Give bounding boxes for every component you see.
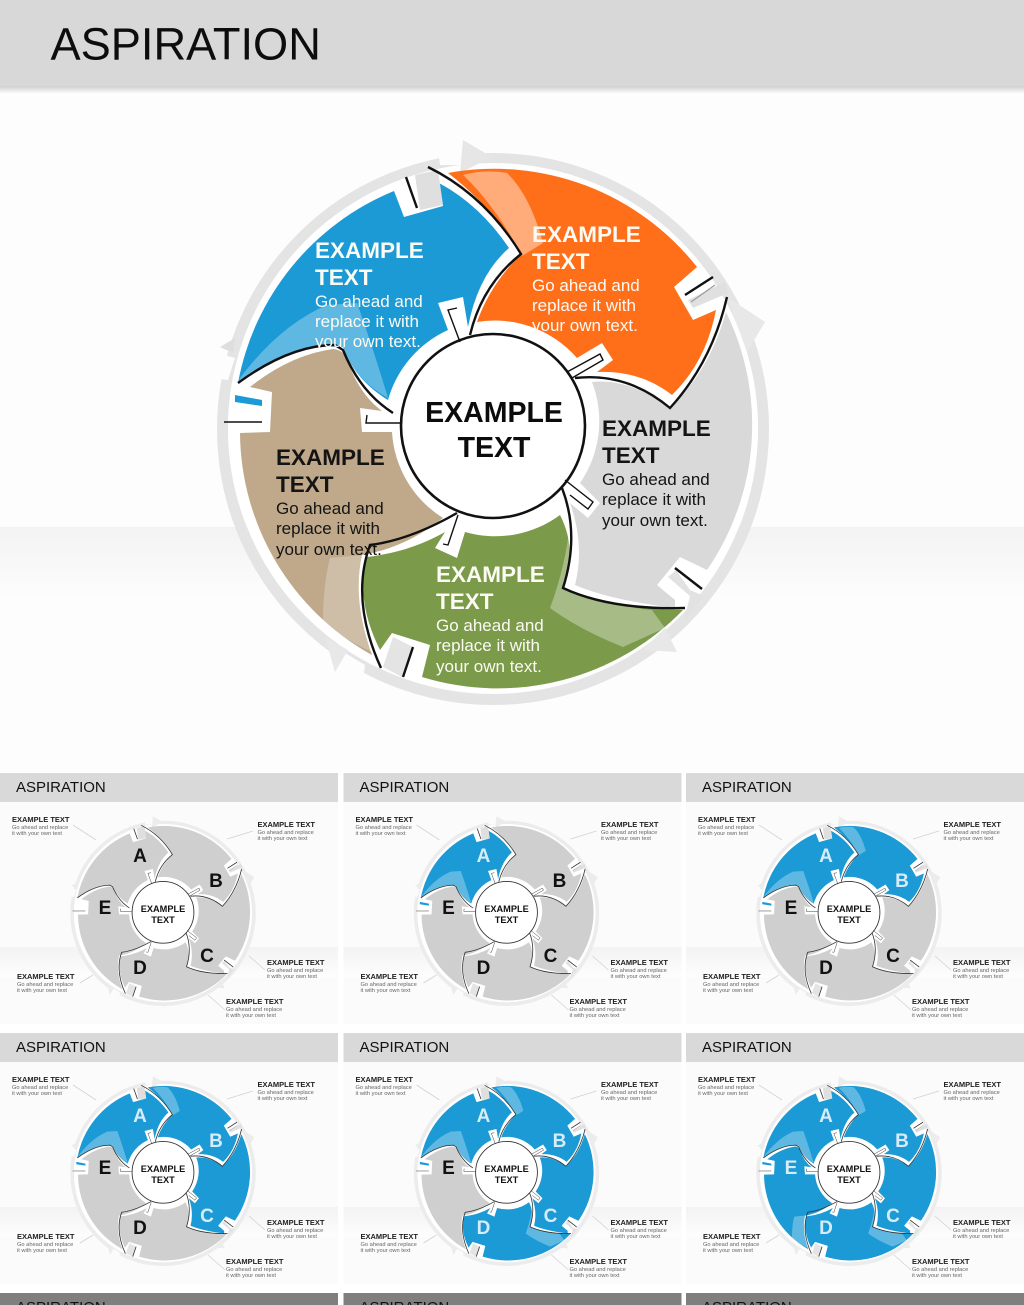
- panel: thumbnail 4, segments A to C highlighted: it with your own text: [226, 1273, 276, 1279]
- panel: thumbnail 6, all segments highlighted: D: [819, 1218, 833, 1239]
- text block: tan segment: replace it with: [276, 519, 380, 538]
- panel: thumbnail 4, segments A to C highlighted: it with your own text: [12, 1091, 62, 1097]
- panel: thumbnail 3, segments A and B highlighted: Go ahead and replace: [698, 825, 754, 831]
- text block: grey segment: Go ahead and: [602, 470, 710, 489]
- panel: thumbnail 1, no segments highlighted: C: [200, 946, 214, 967]
- panel: thumbnail 2, segment A highlighted: A: [477, 846, 491, 867]
- panel: thumbnail 4, segments A to C highlighted: EXAMPLE TEXT: [226, 1257, 284, 1266]
- panel: thumbnail 2, segment A highlighted: it with your own text: [360, 988, 411, 994]
- panel: thumbnail 5, segments A to D highlighted: EXAMPLE TEXT: [360, 1232, 418, 1241]
- segment B: orange arrow: [448, 169, 716, 395]
- text block: tan segment: [276, 445, 385, 559]
- title banner: ASPIRATION: [50, 18, 321, 70]
- panel: thumbnail 5, segments A to D highlighted: Go ahead and replace: [570, 1267, 626, 1273]
- panel: thumbnail 4, segments A to C highlighted: it with your own text: [258, 1096, 308, 1102]
- text block: orange segment: TEXT: [532, 249, 590, 274]
- panel: thumbnail 4, segments A to C highlighted: EXAMPLE TEXT: [258, 1080, 315, 1089]
- panel: thumbnail 4, segments A to C highlighted: ASPIRATION: [16, 1039, 106, 1056]
- panel: thumbnail 5, segments A to D highlighted: B: [553, 1131, 566, 1152]
- centre circle: [401, 334, 585, 518]
- panel: thumbnail 6, all segments highlighted: it with your own text: [698, 1091, 748, 1097]
- panel: thumbnail 3, segments A and B highlighted: C: [886, 946, 900, 967]
- panel: thumbnail 2, segment A highlighted: C: [544, 946, 558, 967]
- panel: thumbnail 3, segments A and B highlighted: it with your own text: [953, 974, 1003, 980]
- panel: thumbnail 1, no segments highlighted: it with your own text: [226, 1013, 276, 1019]
- text block: green segment: [436, 562, 545, 676]
- panel: thumbnail 4, segments A to C highlighted: EXAMPLE TEXT: [17, 1232, 75, 1241]
- panel: thumbnail 1, no segments highlighted: E: [99, 898, 111, 919]
- panel: thumbnail 1, no segments highlighted: A: [133, 846, 147, 867]
- panel: thumbnail 1, no segments highlighted: D: [133, 958, 147, 979]
- panel: thumbnail 2, segment A highlighted: EXAMPLE TEXT: [356, 815, 413, 824]
- panel: thumbnail 3, segments A and B highlighted: EXAMPLE: [827, 904, 871, 914]
- panel: thumbnail 1, no segments highlighted: Go ahead and replace: [17, 982, 73, 988]
- panel: main diagram background: [0, 92, 1024, 772]
- panel: thumbnail 4, segments A to C highlighted: Go ahead and replace: [267, 1228, 323, 1234]
- panel: thumbnail 3, segments A and B highlighted: it with your own text: [944, 836, 994, 842]
- panel: thumbnail 2, segment A highlighted: Go ahead and replace: [360, 982, 417, 988]
- panel: thumbnail 5, segments A to D highlighted: it with your own text: [601, 1096, 651, 1102]
- panel: thumbnail 1, no segments highlighted: it with your own text: [12, 831, 62, 837]
- tab details and grey shafts: [235, 170, 728, 677]
- panel: thumbnail 1, no segments highlighted: EXAMPLE TEXT: [267, 958, 325, 967]
- panel: thumbnail 4, segments A to C highlighted: EXAMPLE: [141, 1164, 185, 1174]
- text block: grey segment: TEXT: [602, 443, 660, 468]
- panel: thumbnail 1, no segments highlighted: it with your own text: [267, 974, 317, 980]
- panel: thumbnail 4, segments A to C highlighted: A: [133, 1106, 147, 1127]
- text block: tan segment: your own text.: [276, 540, 382, 559]
- text block: blue segment: TEXT: [315, 265, 373, 290]
- center label: TEXT: [458, 432, 531, 464]
- panel: thumbnail 2, segment A highlighted: EXAMPLE TEXT: [360, 972, 418, 981]
- panel: thumbnail 3, segments A and B highlighted: EXAMPLE TEXT: [944, 820, 1001, 829]
- panel: thumbnail 3, segments A and B highlighted: EXAMPLE TEXT: [912, 997, 970, 1006]
- black arrow-head outlines: [224, 167, 727, 677]
- panel: thumbnail 6, all segments highlighted: EXAMPLE TEXT: [912, 1257, 970, 1266]
- panel: thumbnail 4, segments A to C highlighted: E: [99, 1158, 111, 1179]
- text block: blue segment: replace it with: [315, 312, 419, 331]
- panel: thumbnail 1, no segments highlighted: EXAMPLE TEXT: [258, 820, 315, 829]
- panel: thumbnail 6, all segments highlighted: Go ahead and replace: [703, 1242, 759, 1248]
- panel: thumbnail 4, segments A to C highlighted: TEXT: [151, 1175, 175, 1185]
- panel: thumbnail 3, segments A and B highlighted: EXAMPLE TEXT: [703, 972, 761, 981]
- panel: thumbnail 6, all segments highlighted: Go ahead and replace: [953, 1228, 1009, 1234]
- panel: thumbnail 6, all segments highlighted: TEXT: [837, 1175, 861, 1185]
- panel: thumbnail 6, all segments highlighted: EXAMPLE TEXT: [953, 1218, 1011, 1227]
- panel: thumbnail 4, segments A to C highlighted: B: [209, 1131, 223, 1152]
- panel: thumbnail 5, segments A to D highlighted: EXAMPLE TEXT: [356, 1075, 413, 1084]
- text block: grey segment: replace it with: [602, 490, 706, 509]
- text block: orange segment: [532, 222, 641, 335]
- panel: thumbnail 3, segments A and B highlighted: [686, 773, 1024, 1024]
- panel: thumbnail 6, all segments highlighted: E: [785, 1158, 797, 1179]
- text block: blue segment: [315, 238, 424, 351]
- panel: thumbnail 2, segment A highlighted: D: [477, 958, 490, 979]
- panel: thumbnail 3, segments A and B highlighted: TEXT: [837, 915, 861, 925]
- panel: thumbnail 6, all segments highlighted: EXAMPLE TEXT: [944, 1080, 1001, 1089]
- panel: thumbnail 3, segments A and B highlighted: it with your own text: [698, 831, 748, 837]
- panel: thumbnail 5, segments A to D highlighted: C: [544, 1206, 558, 1227]
- panel: thumbnail 2, segment A highlighted: EXAMPLE TEXT: [601, 820, 659, 829]
- panel: thumbnail 1, no segments highlighted: TEXT: [151, 915, 175, 925]
- text block: green segment: replace it with: [436, 636, 540, 655]
- segment C: grey arrow: [570, 312, 752, 608]
- panel: thumbnail 2, segment A highlighted: Go ahead and replace: [356, 825, 412, 831]
- text block: orange segment: your own text.: [532, 316, 638, 335]
- panel: thumbnail 1, no segments highlighted: ASPIRATION: [16, 779, 106, 796]
- cropped bottom row headers: [0, 1293, 1024, 1305]
- panel: thumbnail 2, segment A highlighted: [344, 773, 682, 1024]
- title banner: [0, 0, 1024, 94]
- panel: thumbnail 5, segments A to D highlighted: it with your own text: [360, 1248, 411, 1254]
- panel: thumbnail 5, segments A to D highlighted: EXAMPLE TEXT: [601, 1080, 659, 1089]
- panel: thumbnail 1, no segments highlighted: it with your own text: [17, 988, 67, 994]
- panel: thumbnail 3, segments A and B highlighted: EXAMPLE TEXT: [953, 958, 1011, 967]
- panel: thumbnail 2, segment A highlighted: it with your own text: [601, 836, 651, 842]
- panel: thumbnail 2, segment A highlighted: EXAMPLE TEXT: [570, 997, 627, 1006]
- panel: thumbnail 6, all segments highlighted: it with your own text: [944, 1096, 994, 1102]
- panel: thumbnail 6, all segments highlighted: it with your own text: [703, 1248, 753, 1254]
- panel: thumbnail 4, segments A to C highlighted: C: [200, 1206, 214, 1227]
- panel: thumbnail 5, segments A to D highlighted: A: [477, 1106, 491, 1127]
- panel: thumbnail 5, segments A to D highlighted: it with your own text: [610, 1234, 661, 1240]
- text block: tan segment: Go ahead and: [276, 499, 384, 518]
- panel: thumbnail 4, segments A to C highlighted: it with your own text: [17, 1248, 67, 1254]
- panel: thumbnail 6, all segments highlighted: EXAMPLE TEXT: [703, 1232, 761, 1241]
- panel: thumbnail 5, segments A to D highlighted: [344, 1033, 682, 1284]
- panel: thumbnail 5, segments A to D highlighted: Go ahead and replace: [360, 1242, 417, 1248]
- text block: grey segment: your own text.: [602, 511, 708, 530]
- text block: green segment: TEXT: [436, 589, 494, 614]
- panel: thumbnail 1, no segments highlighted: EXAMPLE TEXT: [17, 972, 75, 981]
- panel: thumbnail 1, no segments highlighted: Go ahead and replace: [258, 830, 314, 836]
- panel: thumbnail 6, all segments highlighted: EXAMPLE TEXT: [698, 1075, 756, 1084]
- panel: thumbnail 5, segments A to D highlighted: EXAMPLE TEXT: [610, 1218, 668, 1227]
- panel: thumbnail 6, all segments highlighted: it with your own text: [912, 1273, 962, 1279]
- panel: thumbnail 5, segments A to D highlighted: ASPIRATION: [360, 1039, 449, 1056]
- panel: thumbnail 3, segments A and B highlighted: E: [785, 898, 797, 919]
- panel: thumbnail 5, segments A to D highlighted: D: [477, 1218, 490, 1239]
- panel: thumbnail 2, segment A highlighted: it with your own text: [610, 974, 661, 980]
- panel: thumbnail 3, segments A and B highlighted: Go ahead and replace: [953, 968, 1009, 974]
- panel: thumbnail 6, all segments highlighted: [686, 1033, 1024, 1284]
- panel: thumbnail 5, segments A to D highlighted: it with your own text: [570, 1273, 620, 1279]
- panel: thumbnail 5, segments A to D highlighted: TEXT: [495, 1175, 519, 1185]
- panel: thumbnail 5, segments A to D highlighted: Go ahead and replace: [601, 1090, 657, 1096]
- panel: thumbnail 3, segments A and B highlighted: B: [895, 871, 909, 892]
- panel: thumbnail 1, no segments highlighted: EXAMPLE: [141, 904, 185, 914]
- panel: thumbnail 1, no segments highlighted: Go ahead and replace: [12, 825, 68, 831]
- panel: thumbnail 5, segments A to D highlighted: EXAMPLE: [484, 1164, 529, 1174]
- panel: thumbnail 4, segments A to C highlighted: Go ahead and replace: [12, 1085, 68, 1091]
- text block: green segment: Go ahead and: [436, 616, 544, 635]
- panel: thumbnail 6, all segments highlighted: Go ahead and replace: [912, 1267, 968, 1273]
- panel: thumbnail 5, segments A to D highlighted: it with your own text: [356, 1091, 406, 1097]
- panel: thumbnail 4, segments A to C highlighted: it with your own text: [267, 1234, 317, 1240]
- panel: thumbnail 6, all segments highlighted: Go ahead and replace: [698, 1085, 754, 1091]
- panel: thumbnail 4, segments A to C highlighted: Go ahead and replace: [258, 1090, 314, 1096]
- panel: thumbnail 2, segment A highlighted: it with your own text: [356, 831, 406, 837]
- panel: thumbnail 4, segments A to C highlighted: [0, 1033, 338, 1284]
- panel: thumbnail 6, all segments highlighted: ASPIRATION: [702, 1039, 792, 1056]
- panel: thumbnail 6, all segments highlighted: C: [886, 1206, 900, 1227]
- segment E: tan arrow: [240, 349, 443, 655]
- panel: thumbnail 6, all segments highlighted: Go ahead and replace: [944, 1090, 1000, 1096]
- panel: thumbnail 5, segments A to D highlighted: Go ahead and replace: [356, 1085, 412, 1091]
- panel: thumbnail 2, segment A highlighted: EXAMPLE: [484, 904, 529, 914]
- panel: thumbnail 4, segments A to C highlighted: D: [133, 1218, 147, 1239]
- panel: thumbnail 2, segment A highlighted: B: [553, 871, 566, 892]
- panel: thumbnail 1, no segments highlighted: B: [209, 871, 223, 892]
- segment A: blue arrow: [238, 183, 509, 400]
- panel: thumbnail 3, segments A and B highlighted: Go ahead and replace: [944, 830, 1000, 836]
- text block: tan segment: TEXT: [276, 472, 334, 497]
- panel: thumbnail 6, all segments highlighted: it with your own text: [953, 1234, 1003, 1240]
- panel: thumbnail 4, segments A to C highlighted: Go ahead and replace: [17, 1242, 73, 1248]
- panel: thumbnail 2, segment A highlighted: E: [442, 898, 455, 919]
- panel: thumbnail 5, segments A to D highlighted: E: [442, 1158, 455, 1179]
- text block: grey segment: EXAMPLE: [602, 416, 711, 441]
- panel: thumbnail 1, no segments highlighted: Go ahead and replace: [267, 968, 323, 974]
- panel: thumbnail 1, no segments highlighted: EXAMPLE TEXT: [12, 815, 70, 824]
- text block: green segment: EXAMPLE: [436, 562, 545, 587]
- text block: orange segment: EXAMPLE: [532, 222, 641, 247]
- panel: thumbnail 1, no segments highlighted: [0, 773, 338, 1024]
- text block: orange segment: Go ahead and: [532, 276, 640, 295]
- panel: thumbnail 1, no segments highlighted: it with your own text: [258, 836, 308, 842]
- panel: thumbnail 5, segments A to D highlighted: EXAMPLE TEXT: [570, 1257, 627, 1266]
- translucent arrow highlights: [238, 171, 665, 652]
- panel: thumbnail 1, no segments highlighted: Go ahead and replace: [226, 1007, 282, 1013]
- panel: thumbnail 6, all segments highlighted: B: [895, 1131, 909, 1152]
- panel: thumbnail 2, segment A highlighted: EXAMPLE TEXT: [610, 958, 668, 967]
- text block: blue segment: your own text.: [315, 332, 421, 351]
- panel: thumbnail 4, segments A to C highlighted: Go ahead and replace: [226, 1267, 282, 1273]
- panel: thumbnail 4, segments A to C highlighted: EXAMPLE TEXT: [12, 1075, 70, 1084]
- panel: thumbnail 3, segments A and B highlighted: it with your own text: [703, 988, 753, 994]
- panel: thumbnail 2, segment A highlighted: ASPIRATION: [360, 779, 449, 796]
- panel: thumbnail 6, all segments highlighted: EXAMPLE: [827, 1164, 871, 1174]
- panel: thumbnail 2, segment A highlighted: TEXT: [495, 915, 519, 925]
- text block: tan segment: EXAMPLE: [276, 445, 385, 470]
- panel: thumbnail 1, no segments highlighted: EXAMPLE TEXT: [226, 997, 284, 1006]
- text block: blue segment: EXAMPLE: [315, 238, 424, 263]
- segment D: green arrow: [363, 515, 683, 688]
- text block: orange segment: replace it with: [532, 296, 636, 315]
- cycle diagram: main wheel: [210, 140, 775, 700]
- panel: thumbnail 3, segments A and B highlighted: D: [819, 958, 833, 979]
- panel: thumbnail 3, segments A and B highlighted: EXAMPLE TEXT: [698, 815, 756, 824]
- panel: thumbnail 6, all segments highlighted: A: [819, 1106, 833, 1127]
- panel: thumbnail 3, segments A and B highlighted: Go ahead and replace: [912, 1007, 968, 1013]
- panel: thumbnail 3, segments A and B highlighted: it with your own text: [912, 1013, 962, 1019]
- text block: grey segment: [602, 416, 711, 530]
- panel: thumbnail 3, segments A and B highlighted: ASPIRATION: [702, 779, 792, 796]
- text block: green segment: your own text.: [436, 657, 542, 676]
- center label: EXAMPLE: [425, 397, 563, 429]
- text block: blue segment: Go ahead and: [315, 292, 423, 311]
- panel: thumbnail 4, segments A to C highlighted: EXAMPLE TEXT: [267, 1218, 325, 1227]
- center label: [425, 397, 563, 464]
- panel: thumbnail 3, segments A and B highlighted: Go ahead and replace: [703, 982, 759, 988]
- panel: thumbnail 2, segment A highlighted: it with your own text: [570, 1013, 620, 1019]
- panel: thumbnail 5, segments A to D highlighted: Go ahead and replace: [610, 1228, 667, 1234]
- outer grey arrow ring: [210, 140, 775, 700]
- panel: thumbnail 2, segment A highlighted: Go ahead and replace: [570, 1007, 626, 1013]
- panel: thumbnail 2, segment A highlighted: Go ahead and replace: [610, 968, 667, 974]
- panel: thumbnail 2, segment A highlighted: Go ahead and replace: [601, 830, 657, 836]
- panel: thumbnail 3, segments A and B highlighted: A: [819, 846, 833, 867]
